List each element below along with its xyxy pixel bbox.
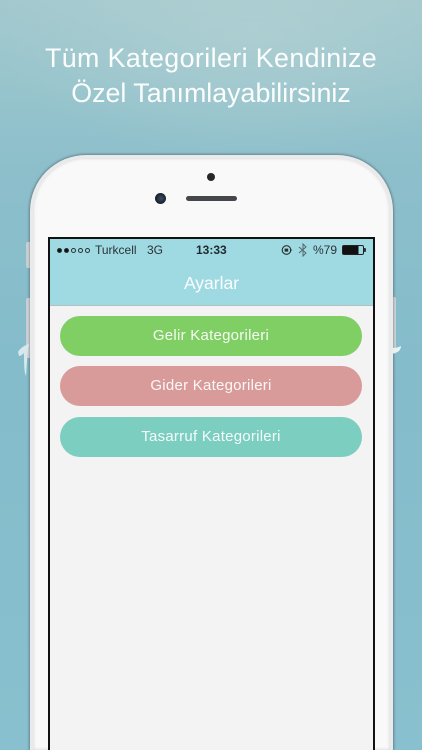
title — [45, 43, 377, 108]
sensor — [207, 173, 215, 181]
button: expense categories: Gider Kategorileri — [150, 377, 272, 394]
button: expense categories — [60, 366, 362, 406]
title: Özel Tanımlayabilirsiniz — [71, 78, 351, 108]
time: 13:33 — [196, 243, 227, 257]
phone left upper button — [26, 242, 30, 268]
battery percent: %79 — [313, 243, 337, 257]
network type: 3G — [147, 243, 163, 257]
carrier: Turkcell — [95, 243, 137, 257]
phone left lower button — [26, 298, 30, 358]
nav title: Ayarlar — [184, 273, 239, 293]
signal dots — [57, 248, 90, 253]
front camera — [155, 193, 166, 204]
screen — [48, 237, 375, 750]
navigation bar — [50, 239, 373, 306]
phone right side button — [392, 297, 396, 354]
speaker — [186, 196, 237, 201]
battery icon — [342, 245, 366, 255]
ribbon fragment right — [393, 346, 401, 353]
rotation lock icon — [282, 245, 292, 255]
button: savings categories: Tasarruf Kategorileri — [141, 428, 281, 445]
title: Tüm Kategorileri Kendinize — [45, 43, 377, 73]
phone — [26, 152, 396, 750]
phone body — [30, 155, 393, 750]
background glow — [0, 0, 422, 150]
button: income categories: Gelir Kategorileri — [153, 327, 269, 344]
bluetooth icon — [298, 243, 307, 257]
button: savings categories — [60, 417, 362, 457]
button: income categories — [60, 316, 362, 356]
ribbon fragment left — [18, 344, 29, 376]
